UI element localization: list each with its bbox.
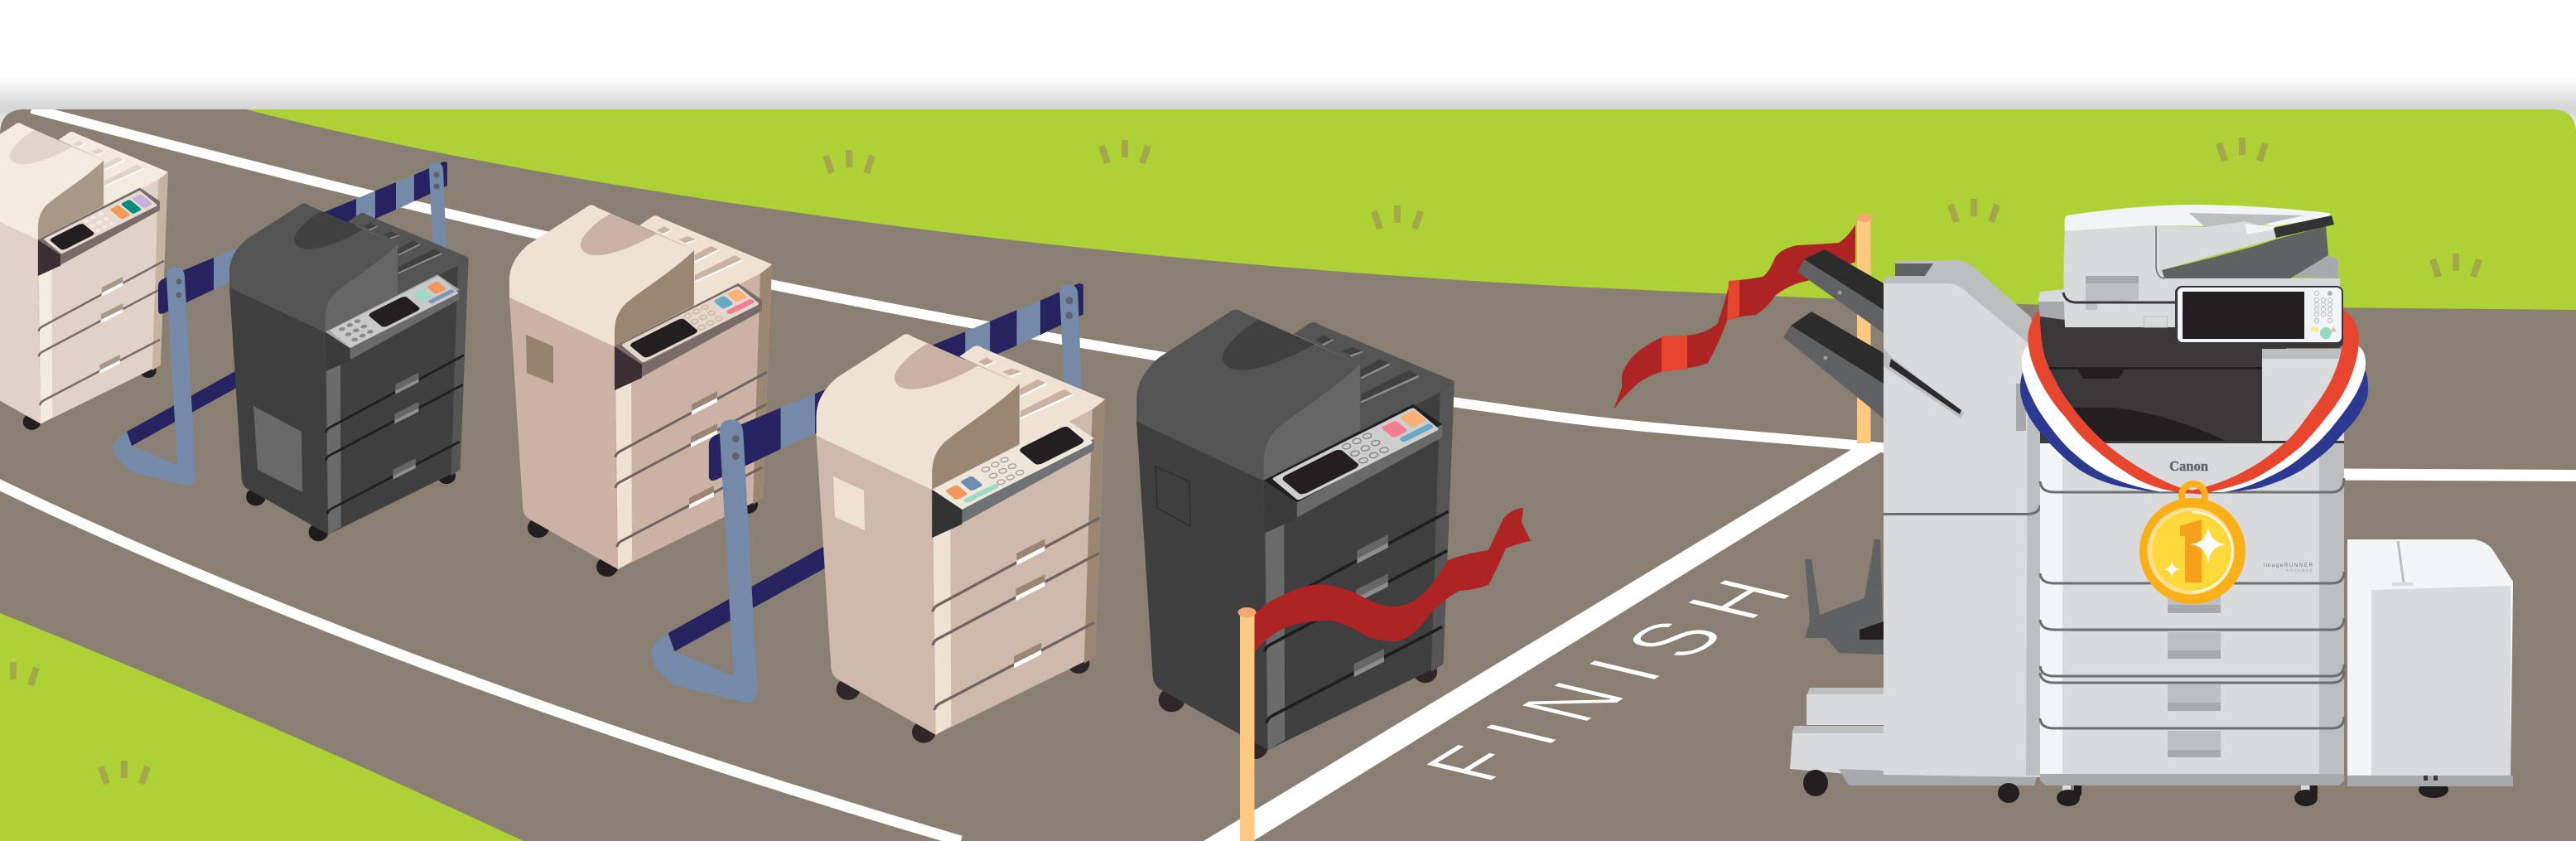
flag pole — [1237, 607, 1256, 841]
model label: ADVANCE — [2286, 568, 2313, 573]
model label: imageRUNNER — [2264, 563, 2313, 568]
printer 2: dark — [229, 203, 469, 541]
track line: right of finish — [2336, 474, 2576, 476]
copier left shoulder — [2038, 289, 2065, 320]
flag light stripes — [1662, 280, 1739, 372]
copier wheels — [2057, 783, 2318, 806]
control panel — [946, 427, 1093, 504]
sparkles — [2164, 526, 2226, 578]
hurdle 1 — [113, 162, 447, 486]
front finish flag — [1237, 508, 1531, 841]
control panel — [1271, 408, 1440, 500]
white band — [2022, 340, 2366, 492]
side window — [833, 476, 865, 530]
drawer seams — [2040, 478, 2344, 728]
tower side strip — [2026, 356, 2040, 776]
flag pole — [1856, 214, 1873, 443]
grass: lower left field — [0, 613, 523, 841]
track line: upper lane — [31, 109, 1889, 448]
copier lower body — [2040, 442, 2344, 776]
brand logo: Canon — [2169, 458, 2209, 474]
blue band — [2020, 340, 2368, 492]
control panel — [621, 286, 760, 363]
numeral one — [2180, 520, 2202, 582]
scanner body — [2064, 221, 2340, 327]
gold medal — [2139, 484, 2246, 604]
flag ribbon — [1254, 508, 1531, 652]
touch control panel — [2175, 286, 2343, 348]
model label — [2264, 563, 2313, 573]
medal disc — [2139, 498, 2246, 604]
tower slot — [1884, 348, 1964, 418]
side window — [526, 335, 553, 384]
finisher unit — [1783, 249, 2040, 803]
base shelves — [1790, 688, 2038, 785]
finish label: FINISH — [1399, 560, 1835, 789]
printer 5: dark — [1136, 309, 1454, 759]
lower tray — [1783, 312, 1884, 418]
printer 1: cream — [0, 123, 168, 430]
track line: lower lane — [0, 483, 961, 841]
control panel — [43, 191, 158, 254]
medal ribbon — [2020, 309, 2368, 495]
finish line — [1204, 447, 1889, 841]
side deck — [2347, 539, 2513, 798]
side window — [253, 406, 302, 492]
scanner lid — [2064, 205, 2331, 231]
red band — [2028, 309, 2359, 495]
scanner tray — [2162, 226, 2328, 278]
side window — [1155, 466, 1190, 526]
tower seam — [1884, 505, 2040, 514]
drawer handles — [2168, 597, 2221, 757]
hurdle 2 — [651, 283, 1083, 703]
grass: upper field — [246, 109, 2576, 310]
medal hook — [2182, 484, 2205, 507]
main copier — [2038, 205, 2513, 806]
finisher wheels — [1803, 770, 2019, 803]
grass tick marks — [0, 138, 2479, 784]
printer 4: cream with mirrored panel — [817, 334, 1105, 743]
tower back — [1884, 260, 2040, 414]
upper tray — [1797, 249, 1884, 333]
page top shadow — [0, 76, 2576, 138]
keypad dots — [2314, 291, 2332, 323]
control panel — [330, 276, 459, 348]
printer 3: beige — [509, 205, 772, 577]
flag ribbon — [1614, 225, 1855, 409]
scanner unit — [2063, 205, 2340, 327]
lower stacker arm — [1805, 539, 1884, 655]
output bay — [2040, 317, 2344, 443]
back finish flag — [1614, 214, 1873, 443]
tower body — [1884, 283, 2040, 777]
